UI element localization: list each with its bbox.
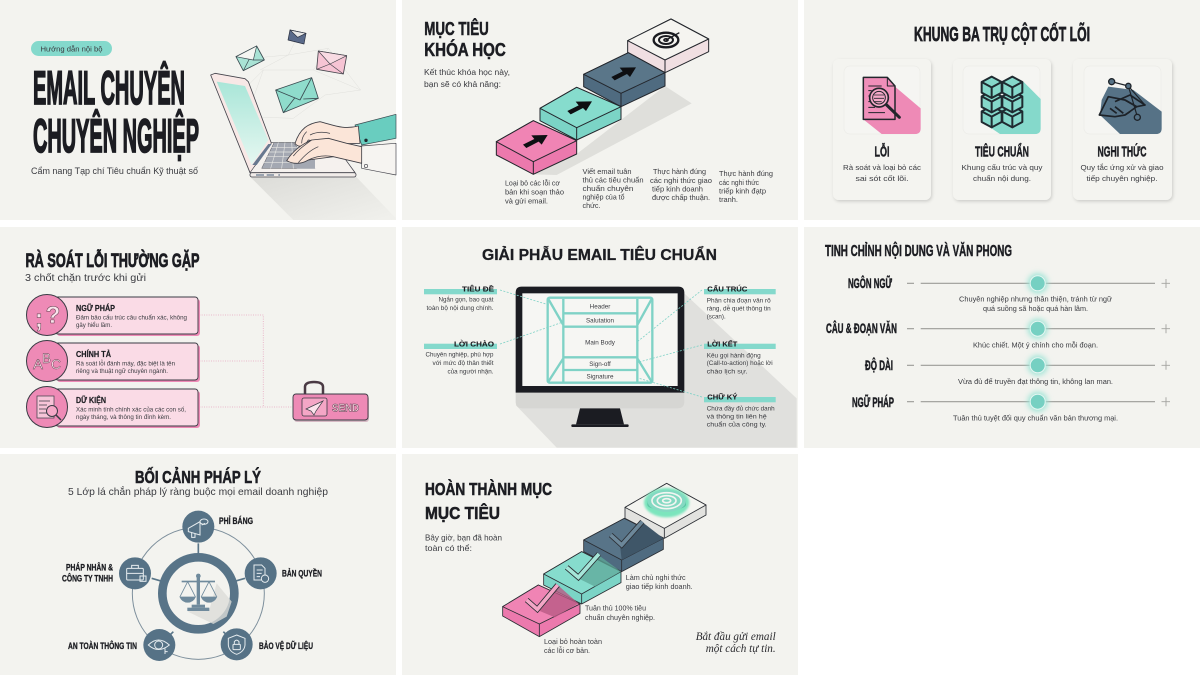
callout: greeting: LỜI CHÀO [454,339,494,348]
text: objective 2: chuẩn chuyên [582,184,634,193]
node: data protection [221,628,253,660]
icon: scales of justice [179,574,217,611]
callout: closing: (Call-to-action) hoặc lời [707,360,773,367]
callout: subject: toàn bộ nội dung chính. [426,305,494,312]
text: objective 3: các nghi thức giao [650,176,712,185]
callout: closing: LỜI KẾT [707,338,738,348]
callout: signature: Chứa đầy đủ chức danh [707,403,775,412]
slider: grammar [852,392,1170,423]
panel: cover: EMAIL CHUYÊN [33,61,185,114]
icon: locked send button: SEND [332,402,359,414]
description: Rà soát và loại bỏ các [843,163,921,172]
panel: course objectives [402,0,798,220]
caption: errors removed: các lỗi cơ bản. [544,646,590,655]
text: objective 2: chức. [582,201,600,210]
panel: common errors [0,227,396,448]
closing line [696,630,776,655]
heading: MỤC TIÊU [425,502,500,523]
badge: internal guide [31,41,112,56]
card: errors [833,59,931,200]
heading: BỐI CẢNH PHÁP LÝ [135,466,261,487]
node: legal entity [119,557,151,589]
wireframe labels: Header [590,303,610,310]
illustration: laptop, hands and envelopes [211,30,396,220]
caption: etiquette mastered: Làm chủ nghi thức [626,573,686,582]
node labels [62,515,322,652]
description [843,163,921,183]
callout: greeting: của người nhận. [448,367,494,375]
row: spelling: Rà soát lỗi đánh máy, đặc biệt là tên [76,360,175,368]
slider: sentence and paragraph [826,319,1170,349]
callout: closing: Kêu gọi hành động [707,352,761,359]
callout: greeting [424,339,497,375]
slider: grammar: NGỮ PHÁP [852,395,894,410]
panel: cover [0,0,396,220]
label: LỖI [874,142,890,160]
callout: signature: CHỮ KÝ [707,393,737,402]
row: spelling: C [51,356,61,372]
caption: standards met: chuẩn chuyên nghiệp. [585,613,655,622]
callout: signature: chuẩn của công ty. [707,420,767,428]
node: defamation [182,511,214,543]
text: objective 3 [650,167,712,202]
intro text [425,533,502,553]
node labels: BẢN QUYỀN [282,568,322,580]
row: grammar: NGỮ PHÁP [76,303,115,313]
heading [424,18,506,60]
diagram: five-layer ring [119,511,277,661]
chart: isometric staircase [496,19,709,175]
heading: KHUNG BA TRỤ CỘT CỐT LÕI [914,22,1090,46]
row: grammar: ? [46,302,60,329]
intro text: Kết thúc khóa học này, [424,68,510,77]
wireframe labels: Sign-off [589,361,611,368]
slider: grammar: Tuân thủ tuyệt đối quy chuẩn văn bản thương mại. [953,414,1118,423]
wireframe labels [585,303,616,380]
description: chuẩn nội dung. [973,174,1031,183]
slider: length: ĐỘ DÀI [865,358,893,373]
text: objective 2 [582,167,644,210]
chart: completed staircase [503,483,706,637]
row: data [26,386,200,428]
slider: language: NGÔN NGỮ [848,276,892,291]
intro text: toàn có thể: [425,543,472,553]
row: spelling: A [33,356,44,372]
caption: errors removed [544,637,602,655]
intro text [424,68,510,89]
panel: email anatomy [402,227,798,448]
node labels: AN TOÀN THÔNG TIN [68,640,137,652]
row: spelling: B [42,350,51,366]
callout: structure: (scan). [707,313,726,320]
caption: etiquette mastered: giao tiếp kinh doanh. [626,582,693,591]
description: sai sót cốt lõi. [856,174,908,183]
description: Khung cấu trúc và quy [962,163,1043,172]
callout: structure: Phân chia đoạn văn rõ [707,297,771,304]
slider: language [848,273,1170,313]
text: objective 4 [719,169,773,204]
heading: HOÀN THÀNH MỤC [425,478,552,499]
text: objective 1: bản khi soạn thảo [505,187,564,196]
caption: standards met: Tuân thủ 100% tiêu [585,604,646,613]
callout: structure [704,284,776,320]
closing line: Bắt đầu gửi email [696,630,776,643]
text: objective 3: Thực hành đúng [653,167,706,176]
callout: greeting: Chuyên nghiệp, phù hợp [426,352,494,359]
callout: greeting: với mức độ thân thiết [432,358,494,367]
row: data: ngày tháng, và thông tin đính kèm. [76,415,171,421]
label: TIÊU CHUẨN [975,142,1029,160]
slider: language: quá suồng sã hoặc quá hàn lâm. [983,304,1088,313]
heading: TINH CHỈNH NỘI DUNG VÀ VĂN PHONG [825,242,1012,260]
panel: legal context [0,454,396,675]
heading: MỤC TIÊU [424,18,489,39]
row: spelling: riêng và thuật ngữ chuyên ngành. [76,369,168,375]
slider: length: Vừa đủ để truyền đạt thông tin, không lan man. [958,377,1113,386]
callout: subject [424,284,497,312]
panel: three pillars [804,0,1200,220]
callout: closing [704,338,776,375]
dotted connectors to lock [199,315,293,407]
caption: etiquette mastered [626,573,693,591]
caption: errors removed: Loại bỏ hoàn toàn [544,637,602,646]
text: objective 4: tranh. [719,195,738,204]
icon: locked send button [293,382,369,422]
heading [425,478,552,523]
slider: sentence and paragraph: CÂU & ĐOẠN VĂN [826,321,897,336]
slider: length [865,355,1170,386]
subtitle: Cẩm nang Tạp chí Tiêu chuẩn Kỹ thuật số [31,166,199,177]
text: objective 3: tiếp kinh doanh [652,184,703,194]
dashed leader lines [500,290,702,397]
heading: GIẢI PHẪU EMAIL TIÊU CHUẨN [482,246,717,264]
subheading: 5 Lớp lá chắn pháp lý ràng buộc mọi email doanh nghiệp [68,485,328,498]
intro text: Bây giờ, bạn đã hoàn [425,533,502,543]
subheading: 3 chốt chặn trước khi gửi [25,272,146,284]
text: objective 1: và gửi email. [505,196,548,205]
row: grammar: gây hiểu lầm. [76,322,112,329]
label: NGHI THỨC [1098,142,1147,160]
caption: standards met [585,604,655,622]
text: objective 4: triếp kinh đạtp [719,186,766,196]
row: grammar [26,294,200,336]
card: etiquette [1073,59,1172,200]
text: objective 2: nghiệp của tổ [582,192,624,202]
description [962,163,1043,183]
wireframe labels: Salutation [586,318,614,325]
wireframe labels: Signature [587,373,614,380]
description: Quy tắc ứng xử và giao [1080,163,1164,172]
callout: subject: TIÊU ĐỀ [462,284,494,294]
text: objective 2: thủ các tiêu chuẩn [582,176,644,184]
text: objective 2: Viết email tuân [582,167,632,176]
node labels: PHỈ BÁNG [219,515,253,527]
row: spelling [26,340,200,382]
title [33,61,199,162]
callout: structure: ràng, dễ quét thông tin [707,303,771,312]
intro text: bạn sẽ có khả năng: [424,80,501,89]
callout: closing: chào lịch sự. [707,368,748,375]
node labels: BẢO VỆ DỮ LIỆU [259,640,313,652]
slider: language: Chuyên nghiệp nhưng thân thiện, tránh từ ngữ [959,297,1112,304]
callout: signature: và thông tin liên hệ [707,413,767,420]
text: objective 1: Loại bỏ các lỗi cơ [505,179,560,188]
callout: signature [704,393,776,428]
heading: KHÓA HỌC [424,39,506,60]
node labels: PHÁP NHÂN & [66,562,113,574]
icon: handshake [1099,79,1162,134]
icon: block cubes [982,77,1041,134]
slider: sentence and paragraph: Khúc chiết. Một ý chính cho mỗi đoạn. [973,340,1098,349]
callout: subject: Ngắn gọn, bao quát [438,294,494,303]
panel: tone sliders [804,227,1200,448]
row: grammar: ; [35,303,43,333]
heading: RÀ SOÁT LỖI THƯỜNG GẶP [26,250,200,272]
node: copyright [245,557,277,589]
description: tiếp chuyên nghiệp. [1086,174,1158,183]
text: objective 1 [505,179,564,205]
description [1080,163,1164,183]
callout: structure: CẤU TRÚC [707,284,748,294]
illustration: monitor with wireframe [516,287,797,448]
wireframe labels: Main Body [585,339,616,346]
row: data: DỮ KIỆN [76,394,106,405]
row: grammar: Đảm bảo cấu trúc câu chuẩn xác, không [76,314,187,322]
icon: document and magnifier [863,77,921,134]
badge: internal guide: Hướng dẫn nội bộ [40,44,102,53]
card: standards [953,59,1051,200]
closing line: một cách tự tin. [706,643,776,655]
text: objective 4: Thực hành đúng [719,169,773,178]
node labels: CÔNG TY TNHH [62,573,113,585]
row: data: Xác minh tính chính xác của các con số, [76,406,186,414]
text: objective 3: được chấp thuận. [652,193,710,202]
row: spelling: CHÍNH TẢ [76,348,111,359]
text: objective 4: các nghi thức [719,178,759,187]
panel: cover: CHUYÊN NGHIỆP [33,109,199,162]
node: information security [143,629,175,661]
panel: goals achieved [402,454,798,675]
